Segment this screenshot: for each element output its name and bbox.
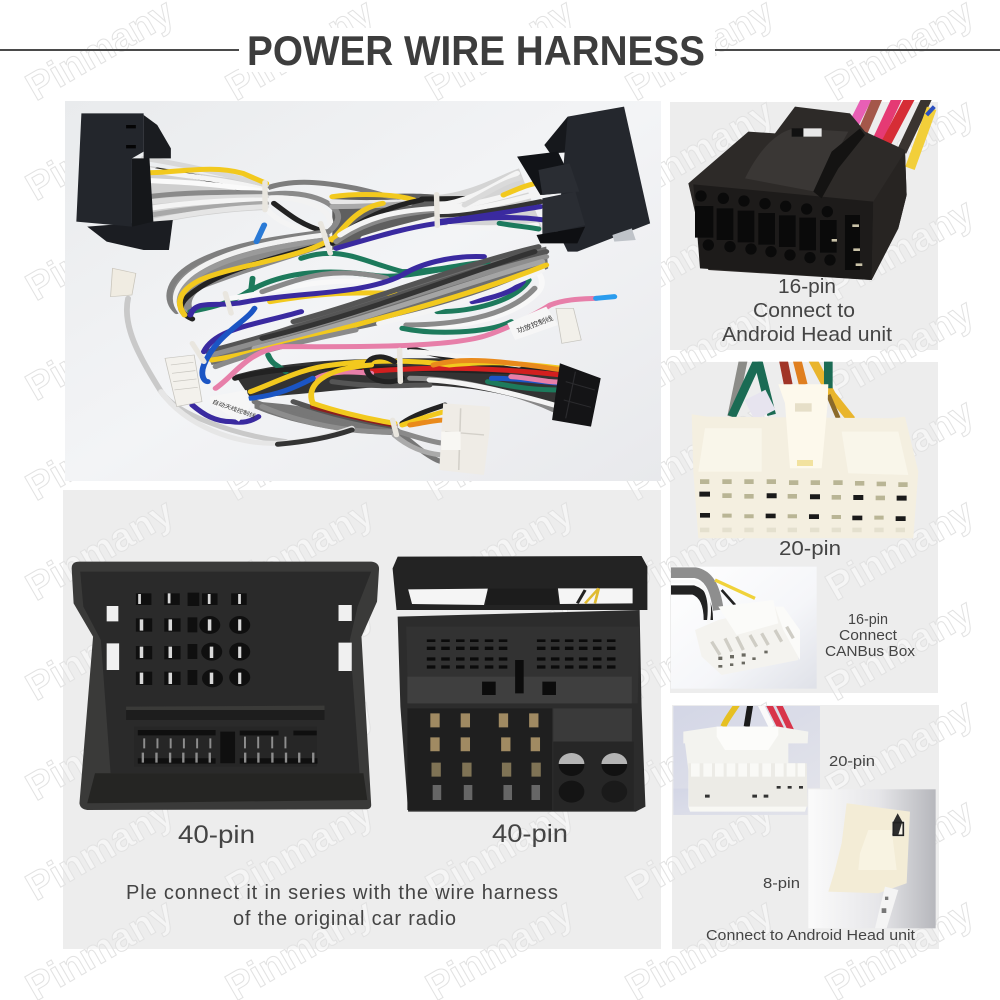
panel: full wire harness photo <box>65 101 661 481</box>
label: connect to Android head unit: Connect to Android Head unit <box>706 927 916 944</box>
connector photo: 16-pin CANBus <box>671 567 817 689</box>
label: 16-pin CANBus <box>825 611 915 660</box>
watermark grid: Pinmany <box>819 91 981 209</box>
metal tips <box>832 224 862 266</box>
watermark grid: Pinmany <box>819 791 981 909</box>
pin window grids <box>427 639 615 669</box>
text: series connection note: Ple connect it in series with the wire harness <box>126 882 558 904</box>
wire bundle masses <box>134 163 562 435</box>
connector: small white 4-pin <box>111 268 136 297</box>
label: 40-pin left: 40-pin <box>178 821 255 849</box>
brass pins <box>430 713 540 751</box>
label: 16-pin head unit: 16-pin <box>778 276 836 298</box>
watermark grid: Pinmany <box>619 791 781 909</box>
watermark grid: Pinmany <box>819 291 981 409</box>
watermark grid: Pinmany <box>419 391 581 509</box>
watermark grid: Pinmany <box>19 91 181 209</box>
label: 16-pin CANBus: Connect <box>839 627 898 644</box>
label: 16-pin CANBus: CANBus Box <box>825 643 915 660</box>
metal pins <box>138 593 241 684</box>
watermark grid: Pinmany <box>819 491 981 609</box>
wires <box>852 100 936 170</box>
title background band <box>239 28 715 72</box>
watermark grid: Pinmany <box>819 191 981 309</box>
watermark grid: Pinmany <box>19 791 181 909</box>
label: 8-pin: 8-pin <box>763 875 800 892</box>
panel: 40-pin connectors background <box>63 490 661 949</box>
wire tag: antenna <box>210 390 257 422</box>
watermark grid: Pinmany <box>619 391 781 509</box>
watermark grid: Pinmany <box>19 391 181 509</box>
connector: black 16-pin plug <box>552 363 601 427</box>
watermark grid: Pinmany <box>219 391 381 509</box>
connector photo: 8-pin white <box>808 789 936 928</box>
connector photo: small 20-pin white <box>673 700 820 815</box>
wire tag: AMP-CON <box>507 307 558 340</box>
label: 16-pin head unit: Android Head unit <box>722 324 892 346</box>
panel: 16-pin head unit background <box>670 102 938 350</box>
watermark grid: Pinmany <box>419 691 581 809</box>
cut-outs <box>107 605 352 671</box>
connector: white lower plug <box>439 403 490 475</box>
watermark grid: Pinmany <box>419 791 581 909</box>
watermark grid: Pinmany <box>619 91 781 209</box>
connector: white 20-pin plug <box>165 355 202 407</box>
watermark grid: Pinmany <box>219 491 381 609</box>
cavity grid <box>700 479 908 520</box>
label: small 20-pin: 20-pin <box>829 753 875 770</box>
wires <box>728 362 855 418</box>
panel: 20-pin background <box>670 362 938 693</box>
watermark grid: Pinmany <box>19 491 181 609</box>
label: 16-pin CANBus: 16-pin <box>848 611 888 628</box>
watermark grid: Pinmany <box>19 291 181 409</box>
watermark grid: Pinmany <box>19 191 181 309</box>
panel: 20-pin and 8-pin background <box>672 705 939 949</box>
watermark grid: Pinmany <box>19 691 181 809</box>
watermark grid: Pinmany <box>619 191 781 309</box>
title rule: left <box>0 49 239 51</box>
watermark grid: Pinmany <box>19 591 181 709</box>
title rule: right <box>715 49 1000 51</box>
label: 40-pin right: 40-pin <box>492 820 568 848</box>
pin holes <box>695 190 860 270</box>
wire tag: antenna: 自动天线控制线 <box>211 398 257 420</box>
wire tag: AMP-CON: 功放控制线 <box>515 314 555 335</box>
watermark grid: Pinmany <box>619 291 781 409</box>
connector photo: 40-pin female <box>72 562 379 810</box>
label: 20-pin: 20-pin <box>779 538 841 560</box>
watermark grid: Pinmany <box>419 491 581 609</box>
watermark grid: Pinmany <box>819 591 981 709</box>
watermark grid: Pinmany <box>619 691 781 809</box>
connector: large left black plug <box>76 113 173 250</box>
title: POWER WIRE HARNESS <box>247 27 705 74</box>
label: 16-pin head unit: Connect to <box>753 300 855 322</box>
dark cavities <box>136 593 318 764</box>
wires: harness bundles <box>127 158 614 462</box>
text: series connection note: of the original car radio <box>233 908 456 930</box>
watermark grid: Pinmany <box>619 491 781 609</box>
connector: small white right plug <box>556 308 581 343</box>
watermark grid: Pinmany <box>819 691 981 809</box>
watermark grid: Pinmany <box>619 591 781 709</box>
watermark grid: Pinmany <box>819 391 981 509</box>
connector photo: 20-pin white plug <box>692 352 918 538</box>
connector photo: 40-pin male with back frame <box>393 556 647 812</box>
watermark grid: Pinmany <box>419 591 581 709</box>
cable ties <box>192 182 437 435</box>
round terminals <box>559 754 584 776</box>
connector: large right black plug <box>517 107 650 252</box>
label: 16-pin head unit <box>722 276 892 346</box>
connector photo: 16-pin black head unit plug <box>688 88 934 280</box>
watermark grid: Pinmany <box>219 691 381 809</box>
watermark grid: Pinmany <box>219 591 381 709</box>
text: series connection note <box>126 882 558 930</box>
watermark grid: Pinmany <box>219 791 381 909</box>
